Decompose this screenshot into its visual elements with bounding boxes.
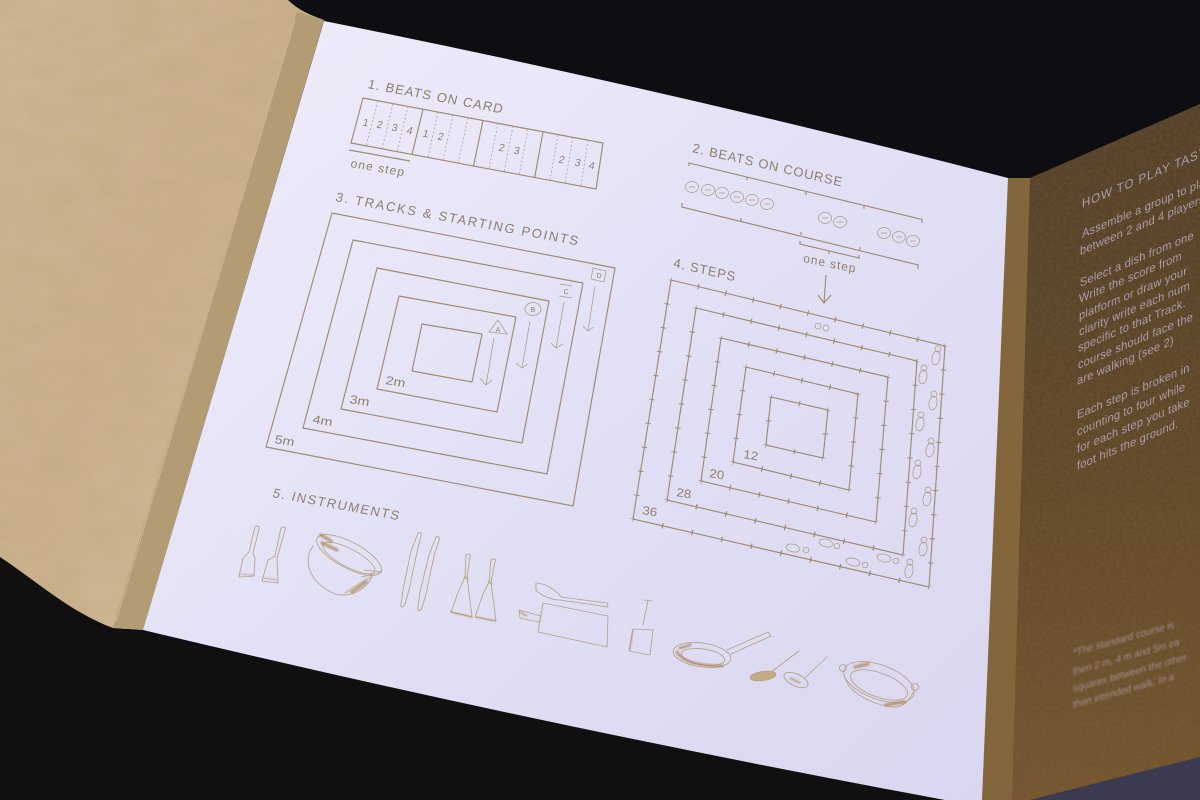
starting point D: D xyxy=(596,273,602,280)
panel footnote: *The standard course is xyxy=(1073,620,1174,659)
step labels: 12 xyxy=(743,447,759,464)
course line top xyxy=(689,163,922,223)
icon: cooking pot xyxy=(308,527,387,595)
arrow down to steps xyxy=(818,275,831,303)
starting point D xyxy=(583,268,606,331)
white inner page xyxy=(143,21,1008,800)
step labels xyxy=(642,447,759,520)
icon: rolling pins xyxy=(401,533,439,611)
panel paragraph 2: Write the score from xyxy=(1079,248,1182,306)
right brown panel xyxy=(982,104,1200,800)
panel paragraph 3 xyxy=(1077,360,1190,473)
section 2: beats on course xyxy=(682,140,922,303)
panel paragraph 2: specific to that Track. xyxy=(1078,295,1186,355)
step labels: 36 xyxy=(642,503,658,520)
panel paragraph 2 xyxy=(1077,228,1194,388)
icon: bench scrapers xyxy=(451,554,496,621)
step squares xyxy=(633,280,945,587)
one step bracket xyxy=(800,241,859,258)
footprints bottom side xyxy=(785,538,899,568)
beat numbers: 1 xyxy=(421,129,430,140)
beat numbers: 1 xyxy=(361,118,370,129)
panel paragraph 3: foot hits the ground. xyxy=(1077,416,1178,473)
diagrams xyxy=(239,76,945,711)
beat circles xyxy=(686,182,920,246)
heading 3: 3. TRACKS & STARTING POINTS xyxy=(334,189,580,248)
panel paragraph 3: for each step you take xyxy=(1077,394,1190,456)
footprints right side xyxy=(904,346,941,579)
panel paragraph 2: Select a dish from one xyxy=(1080,228,1194,290)
one step label: one step xyxy=(803,251,857,276)
section 3: tracks and starting points xyxy=(266,189,615,506)
track labels xyxy=(273,373,407,449)
panel paragraph 3: counting to four while xyxy=(1077,379,1185,439)
track labels: 2m xyxy=(384,373,407,390)
footprints top xyxy=(815,323,829,331)
beat numbers: 2 xyxy=(497,143,506,154)
card grid xyxy=(351,98,603,189)
beat numbers xyxy=(361,118,596,172)
track squares xyxy=(266,213,615,506)
track labels: 4m xyxy=(311,412,334,429)
icon: small spatula xyxy=(629,600,653,655)
beat numbers: 2 xyxy=(557,155,566,166)
beat numbers: 4 xyxy=(405,126,414,137)
panel footnote: squares between the other xyxy=(1073,652,1187,695)
starting point C: C xyxy=(563,289,569,296)
panel paragraph 2: platform or draw your xyxy=(1079,263,1187,323)
panel footnote xyxy=(1073,620,1187,711)
step labels: 28 xyxy=(676,485,692,502)
section 5: instruments xyxy=(239,485,920,711)
one step label: one step xyxy=(349,156,406,179)
beat numbers: 4 xyxy=(587,161,596,172)
panel paragraph 2: are walking (see 2) xyxy=(1077,333,1174,388)
icon: spoons xyxy=(750,651,827,691)
panel paragraph 2: clarity write each num xyxy=(1079,278,1190,339)
beat numbers: 3 xyxy=(573,158,582,169)
icon: cutting board and palette knife xyxy=(519,583,608,647)
beat numbers: 2 xyxy=(375,120,384,131)
starting point A xyxy=(480,320,507,385)
icon: pastry brushes xyxy=(239,526,285,583)
track labels: 3m xyxy=(348,392,371,409)
flap fold strip xyxy=(113,12,324,630)
starting point B: B xyxy=(531,307,536,314)
lower table tone xyxy=(0,557,945,800)
starting point A: A xyxy=(496,327,501,334)
starting point C xyxy=(551,284,572,348)
icon: oval baking dish xyxy=(838,653,920,711)
track labels: 5m xyxy=(273,432,296,449)
beat numbers: 3 xyxy=(390,123,399,134)
heading 5: 5. INSTRUMENTS xyxy=(271,485,402,523)
beat numbers: 2 xyxy=(436,132,445,143)
right fold strip xyxy=(982,178,1030,800)
section 4: steps xyxy=(633,255,945,587)
beat numbers: 3 xyxy=(512,146,521,157)
heading 1: 1. BEATS ON CARD xyxy=(366,76,505,116)
panel text: how to play xyxy=(1073,141,1200,711)
panel paragraph 3: Each step is broken in xyxy=(1077,360,1190,422)
starting point B xyxy=(516,302,541,368)
panel footnote: than intended walk. In a xyxy=(1073,671,1175,711)
panel footnote: then 2 m, 4 m and 5m ea xyxy=(1073,637,1180,678)
one step bracket xyxy=(349,150,410,161)
course line bottom xyxy=(682,203,918,269)
step ticks xyxy=(633,280,945,587)
section 1: beats on card xyxy=(349,76,603,189)
step labels: 20 xyxy=(709,466,725,483)
icon: frying pan xyxy=(672,632,771,671)
panel paragraph 2: course should face the xyxy=(1078,309,1193,372)
heading 2: 2. BEATS ON COURSE xyxy=(691,140,844,189)
left flap xyxy=(0,0,324,630)
grey-blue sheet under brochure xyxy=(1030,757,1200,800)
heading 4: 4. STEPS xyxy=(673,255,737,284)
